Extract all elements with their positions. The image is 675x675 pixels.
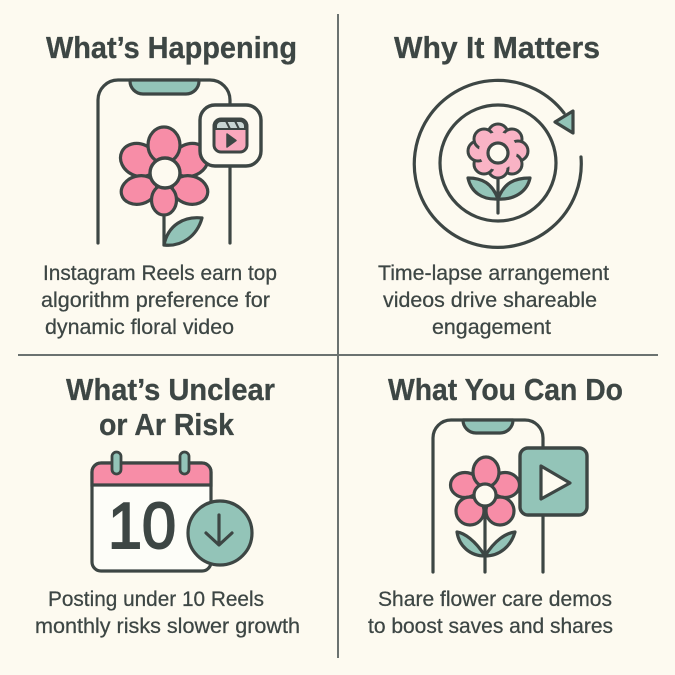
text: Why It Matters body: videos drive shareable bbox=[383, 289, 597, 312]
icon: calendar with 10 and down arrow bbox=[92, 452, 252, 571]
text: What You Can Do body: to boost saves and shares bbox=[368, 615, 613, 638]
heading: What's Happening: What’s Happening bbox=[46, 30, 297, 65]
panel: What's Happening bbox=[41, 30, 297, 339]
text: What's Unclear body: monthly risks slower growth bbox=[35, 615, 300, 638]
text: What You Can Do body: Share flower care demos bbox=[378, 588, 612, 611]
text: What's Unclear body: Posting under 10 Reels bbox=[48, 588, 264, 611]
text: What's Happening body: algorithm preference for bbox=[41, 289, 270, 312]
icon: flower inside circular arrow bbox=[414, 80, 581, 247]
text: What's Unclear body bbox=[35, 588, 300, 638]
text: What You Can Do body bbox=[368, 588, 613, 638]
panel: Why It Matters bbox=[378, 30, 609, 339]
heading: What You Can Do: What You Can Do bbox=[388, 372, 623, 407]
heading: What's Unclear or Ar Risk bbox=[66, 372, 275, 442]
heading: What's Unclear or Ar Risk: What’s Unclear bbox=[66, 372, 275, 407]
text: What's Happening body bbox=[41, 262, 277, 339]
text: Why It Matters body: engagement bbox=[432, 316, 551, 339]
text: What's Happening body: Instagram Reels earn top bbox=[43, 262, 277, 285]
heading: Why It Matters: Why It Matters bbox=[394, 30, 600, 65]
icon: phone with flower and reel badge bbox=[98, 80, 261, 245]
panel: What's Unclear or At Risk bbox=[35, 372, 300, 638]
text: What's Happening body: dynamic floral video bbox=[45, 316, 234, 339]
icon: calendar with 10 and down arrow: 10 bbox=[108, 489, 176, 562]
text: Why It Matters body bbox=[378, 262, 609, 339]
text: Why It Matters body: Time-lapse arrangement bbox=[378, 262, 609, 285]
icon: phone with flower and play button bbox=[433, 420, 587, 572]
panel: What You Can Do bbox=[368, 372, 623, 638]
heading: What's Unclear or Ar Risk: or Ar Risk bbox=[99, 407, 235, 442]
